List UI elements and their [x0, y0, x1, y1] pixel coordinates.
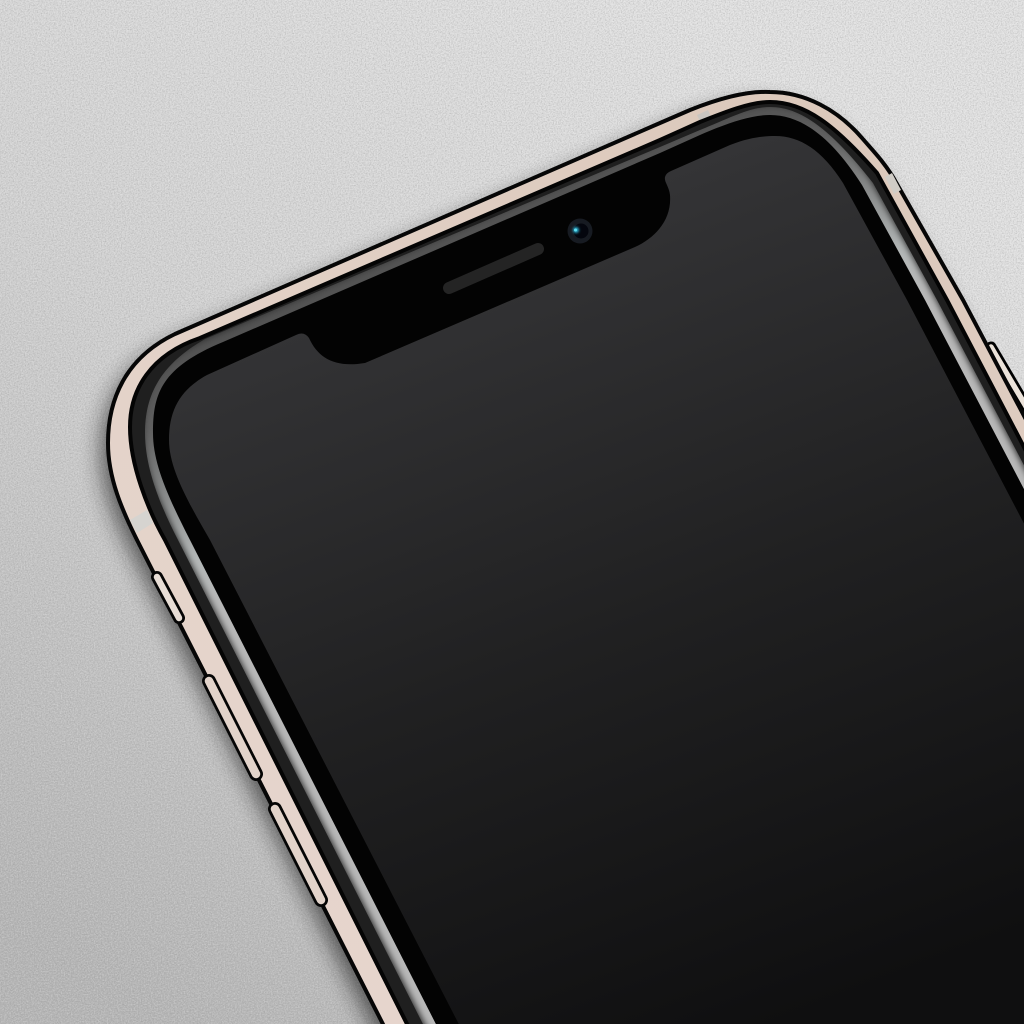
button: mute switch — [157, 577, 179, 618]
button: volume up — [209, 681, 256, 774]
antenna band: right — [885, 173, 901, 194]
earpiece speaker grille — [449, 249, 538, 288]
display screen with notch cut-out — [169, 136, 1024, 1024]
inner dark ring of the frame — [130, 102, 1024, 1024]
black bezel — [153, 115, 1024, 1024]
side button: right edge — [991, 347, 1024, 425]
button: volume down — [275, 809, 321, 900]
front camera — [568, 218, 592, 244]
antenna band: top — [697, 110, 712, 124]
glass edge: grey reflective band — [145, 107, 1024, 1024]
antenna band: left — [130, 510, 153, 533]
